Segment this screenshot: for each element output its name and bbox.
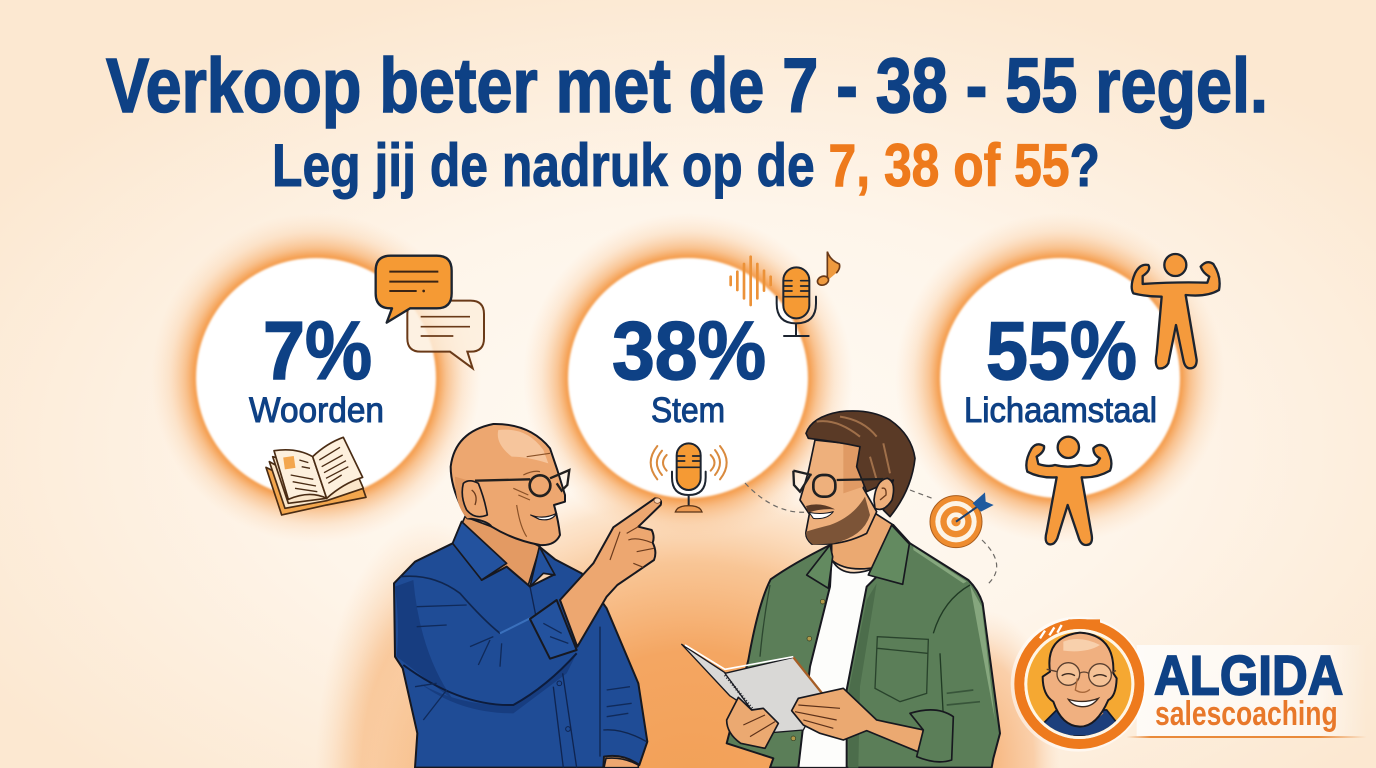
icon: speech bubbles: [376, 256, 484, 368]
person: man in blue shirt pointing: [394, 424, 661, 768]
icon: open book: [266, 437, 366, 515]
ear: [874, 478, 894, 509]
watercolor wash: [315, 470, 1060, 768]
forearm and pointing hand: [560, 498, 661, 647]
person: man in green shirt with notebook: [682, 411, 1000, 768]
subtitle: Leg jij de nadruk op de 7, 38 of 55?: [272, 132, 1100, 199]
value: 7%: 7%: [263, 304, 372, 397]
hair: [806, 411, 915, 517]
icon: flexing figure lower: [1026, 437, 1111, 545]
face: [800, 440, 877, 544]
right hand holding notebook: [792, 688, 923, 753]
green overshirt: [727, 545, 832, 768]
bald head: [451, 424, 565, 545]
panel: 7% woorden: [151, 213, 481, 543]
wrist at bottom: [604, 758, 638, 768]
icon: microphone with sound waves: [651, 443, 727, 512]
logo panel: [1011, 616, 1367, 752]
glasses: [475, 479, 530, 481]
smile: [531, 513, 557, 520]
dashed connector lines: [745, 483, 997, 584]
value: 55%: 55%: [986, 304, 1137, 397]
neck: [455, 517, 540, 585]
notebook: [682, 644, 752, 710]
label: Stem: Stem: [651, 391, 725, 430]
rolled cuff: [530, 600, 577, 659]
glasses: [793, 471, 883, 480]
panel: 38% stem: [523, 213, 853, 543]
ear: [462, 481, 487, 517]
label: Lichaamstaal: Lichaamstaal: [964, 391, 1157, 430]
blue shirt: [394, 522, 647, 768]
logo portrait: [1011, 616, 1146, 752]
label: Woorden: Woorden: [249, 391, 384, 430]
panel: 55% lichaamstaal: [895, 213, 1225, 543]
icon: target with dart: [930, 492, 994, 548]
collar: [807, 545, 833, 588]
smile: [809, 512, 833, 519]
face details: [513, 453, 550, 537]
white t-shirt: [798, 559, 878, 768]
value: 38%: 38%: [612, 304, 766, 397]
collar: [453, 522, 507, 580]
icon: waveform microphone and note: [731, 252, 840, 336]
chest pocket: [875, 637, 928, 702]
brand name: ALGIDA: [1154, 644, 1343, 707]
rolled sleeve: [910, 710, 953, 762]
beard: [806, 497, 870, 545]
neck: [832, 510, 893, 569]
icon: flexing figure upper: [1132, 254, 1220, 368]
left hand holding notebook: [727, 697, 778, 748]
